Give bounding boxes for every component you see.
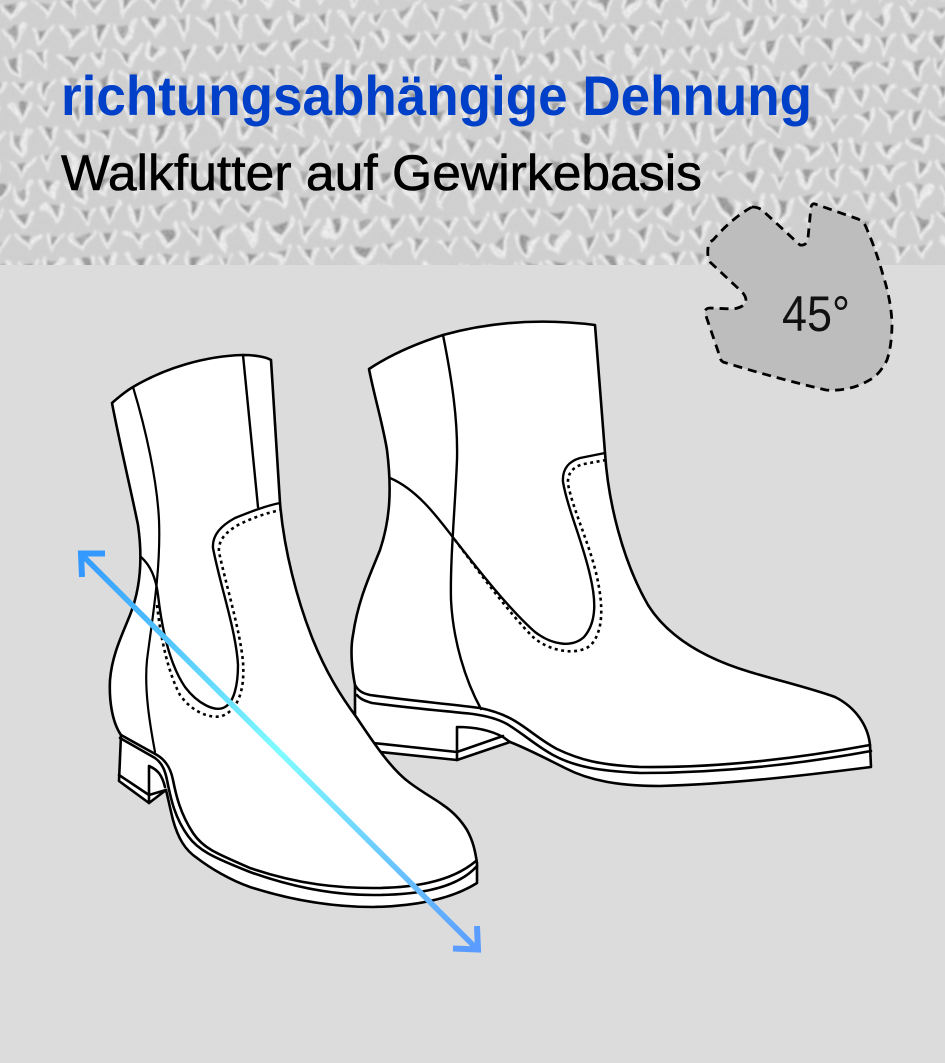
leather swatch: 45 degree xyxy=(705,204,892,390)
dotted stitching xyxy=(157,510,281,717)
subtitle: Walkfutter auf Gewirkebasis xyxy=(61,145,702,201)
arrow shaft xyxy=(80,554,478,950)
curved side seam xyxy=(390,453,605,644)
swatch angle label: 45° xyxy=(782,286,850,342)
welt xyxy=(121,735,476,888)
arrow head: upper left xyxy=(81,554,105,577)
top collar seam xyxy=(243,355,258,507)
stretch direction arrow xyxy=(80,554,478,950)
curved side seam xyxy=(141,503,280,709)
right boot xyxy=(352,322,871,786)
boot upper and sole silhouette xyxy=(110,355,477,907)
dotted stitching xyxy=(455,460,606,651)
title: richtungsabhängige Dehnung xyxy=(61,64,812,127)
heel xyxy=(373,727,510,760)
heel xyxy=(119,766,166,803)
back seam xyxy=(443,335,481,709)
knit fabric texture band xyxy=(0,0,945,295)
back seam xyxy=(133,387,159,752)
left boot xyxy=(110,355,477,907)
arrow head: lower right xyxy=(453,926,478,950)
welt xyxy=(355,685,870,767)
boot upper and sole silhouette xyxy=(352,322,871,786)
